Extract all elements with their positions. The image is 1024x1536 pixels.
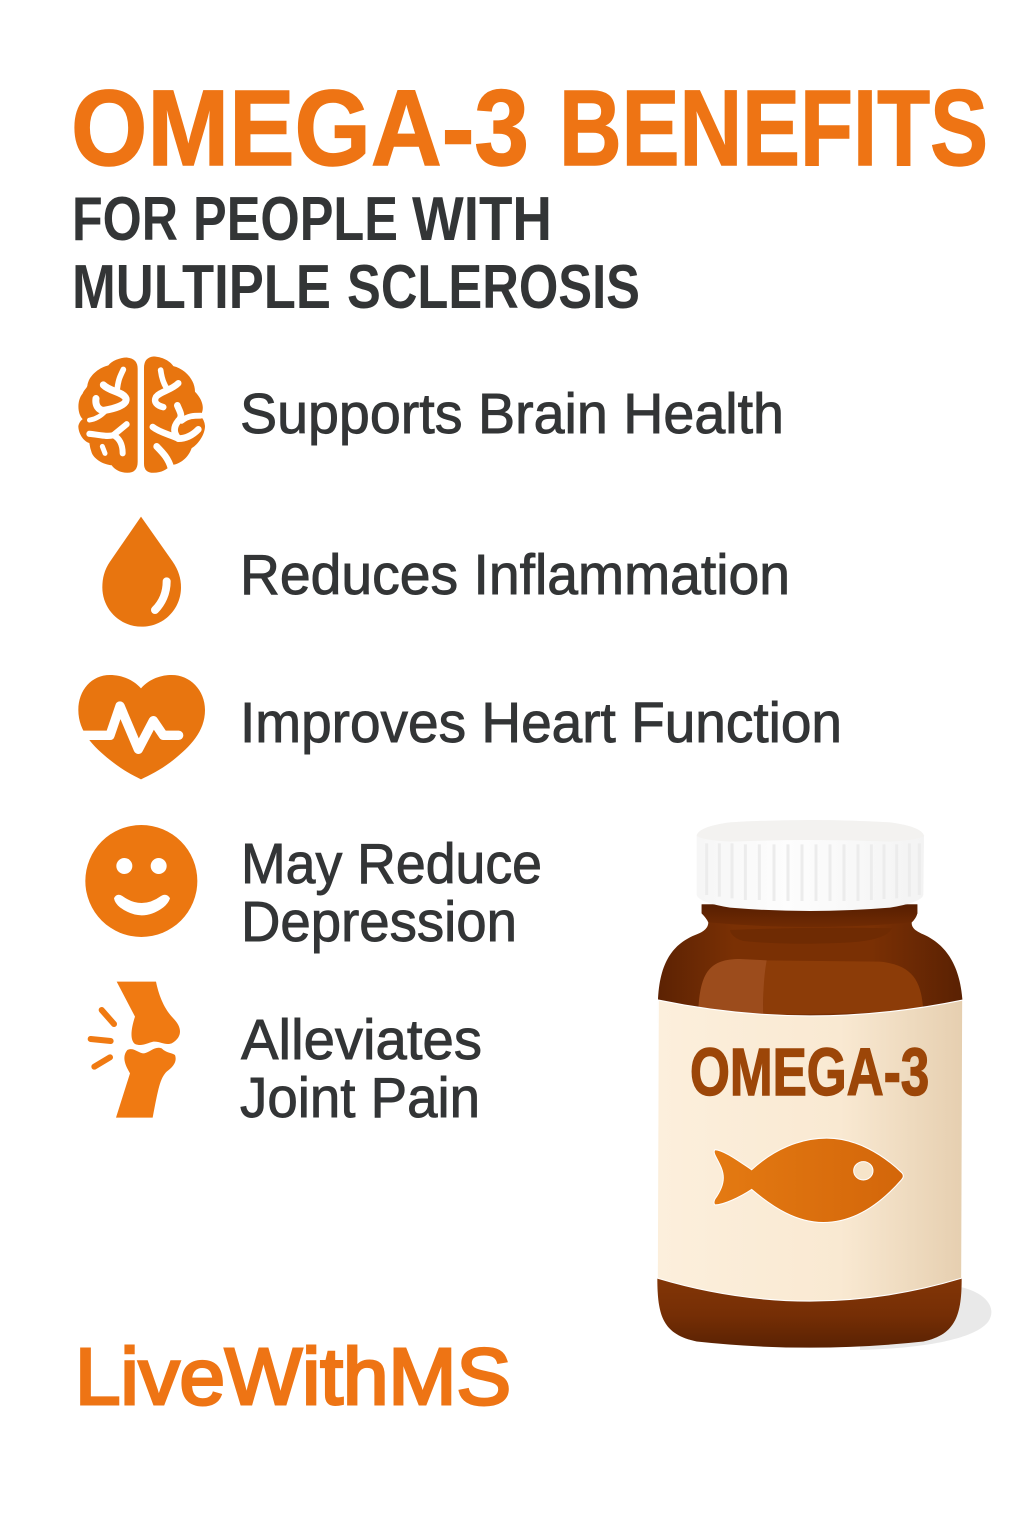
subtitle: FOR: [72, 185, 178, 254]
benefit: May Reduce Depression: May Reduce: [241, 832, 542, 896]
benefit: Reduces Inflammation: Reduces Inflammation: [240, 543, 790, 607]
benefit: May Reduce Depression: Depression: [241, 890, 517, 954]
bottle cap: [697, 820, 924, 911]
benefit: Supports Brain Health: Supports Brain Health: [240, 382, 784, 446]
title: OMEGA-3: [71, 67, 529, 188]
supplement bottle: [657, 820, 991, 1350]
bottle glass shoulder: [658, 904, 963, 1028]
benefit: May Reduce Depression: [241, 832, 542, 954]
icon: fish: [714, 1138, 903, 1223]
subtitle: MULTIPLE: [72, 253, 331, 322]
bottle lower body and label: [657, 1000, 963, 1348]
icon: knee joint: [91, 982, 180, 1118]
bottle label text: OMEGA-3: [690, 1035, 929, 1109]
brand name: LiveWithMS: [75, 1332, 511, 1421]
benefit: Alleviates Joint Pain: Alleviates: [241, 1008, 482, 1072]
subtitle: [72, 185, 640, 322]
benefit: Alleviates Joint Pain: Joint Pain: [240, 1066, 480, 1130]
icon: heart with pulse: [77, 675, 205, 779]
icon: smiling face: [85, 825, 197, 937]
bottle label: [657, 1000, 963, 1301]
title: [71, 67, 988, 188]
bottle shadow: [860, 1287, 991, 1350]
icon: brain: [78, 357, 205, 473]
subtitle: WITH: [412, 185, 552, 254]
benefit: Alleviates Joint Pain: [240, 1008, 482, 1130]
subtitle: SCLEROSIS: [347, 253, 640, 322]
benefit: Improves Heart Function: Improves Heart Function: [240, 691, 842, 755]
icon: water drop: [102, 517, 181, 627]
subtitle: PEOPLE: [193, 185, 398, 254]
